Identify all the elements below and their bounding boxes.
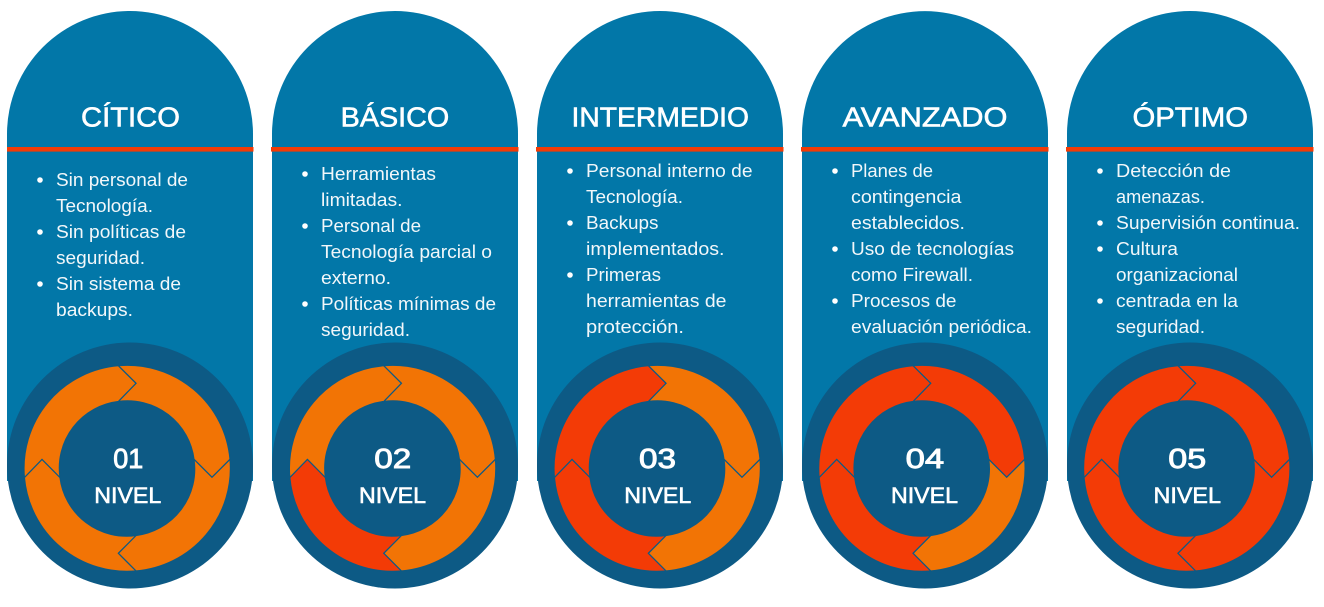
panel: nivel 05 óptimo	[1066, 11, 1314, 588]
panel background	[7, 11, 253, 481]
heading: INTERMEDIO	[572, 102, 749, 132]
panel background	[537, 11, 783, 481]
bullet list: Uso de tecnologías	[851, 239, 1014, 259]
panel: nivel 03 intermedio	[536, 11, 784, 588]
level badge	[537, 342, 783, 588]
bullet list: Personal de	[321, 216, 421, 236]
bullet list	[832, 161, 1032, 337]
bullet list: seguridad.	[1116, 317, 1205, 337]
level label: NIVEL	[1154, 483, 1221, 508]
level badge	[802, 342, 1048, 588]
bullet list: Personal interno de	[586, 161, 752, 181]
level number: 03	[639, 443, 676, 474]
panel: nivel 01 crítico	[7, 11, 254, 588]
bullet list: protección.	[586, 317, 684, 337]
red divider	[801, 147, 1048, 152]
panel: nivel 04 avanzado	[801, 11, 1048, 588]
red divider	[7, 147, 254, 152]
bullet list: Backups	[586, 213, 658, 233]
bullet list: como Firewall.	[851, 265, 973, 285]
bullet list: seguridad.	[321, 320, 410, 340]
panel background	[802, 11, 1048, 481]
level badge	[1067, 342, 1313, 588]
cycle ring	[1084, 365, 1290, 571]
bullet list: Primeras	[586, 265, 661, 285]
level number: 04	[906, 443, 944, 474]
heading: CÍTICO	[81, 102, 180, 132]
bullet list: backups.	[56, 300, 133, 320]
heading: AVANZADO	[842, 102, 1008, 132]
red divider	[536, 147, 784, 152]
bullet list: implementados.	[586, 239, 724, 259]
bullet list	[567, 161, 752, 337]
level label: NIVEL	[624, 483, 691, 508]
bullet list: Tecnología.	[586, 187, 683, 207]
bullet list: Sin personal de	[56, 170, 188, 190]
cycle ring	[554, 365, 760, 571]
bullet list: Políticas mínimas de	[321, 294, 496, 314]
red divider	[271, 147, 518, 152]
heading: BÁSICO	[341, 102, 449, 132]
bullet list	[1097, 161, 1300, 337]
bullet list: seguridad.	[56, 248, 145, 268]
bullet list: Tecnología.	[56, 196, 153, 216]
heading: ÓPTIMO	[1132, 102, 1248, 132]
level label: NIVEL	[359, 483, 426, 508]
bullet list: Tecnología parcial o	[321, 242, 492, 262]
bullet list: amenazas.	[1116, 187, 1205, 207]
bullet list: externo.	[321, 268, 391, 288]
cycle ring	[24, 365, 230, 571]
level badge	[7, 342, 253, 588]
bullet list: contingencia	[851, 187, 963, 207]
bullet list	[37, 170, 188, 320]
level label: NIVEL	[94, 483, 161, 508]
bullet list: Planes de	[851, 161, 933, 181]
cycle ring	[289, 365, 496, 571]
bullet list: establecidos.	[851, 213, 965, 233]
bullet list: evaluación periódica.	[851, 317, 1032, 337]
cycle ring	[819, 365, 1025, 571]
bullet list: centrada en la	[1116, 291, 1239, 311]
bullet list	[302, 164, 496, 340]
bullet list: herramientas de	[586, 291, 726, 311]
bullet list: Cultura	[1116, 239, 1179, 259]
panel background	[272, 11, 518, 481]
level number: 05	[1168, 443, 1206, 474]
bullet list: Sin sistema de	[56, 274, 181, 294]
bullet list: Procesos de	[851, 291, 956, 311]
bullet list: Supervisión continua.	[1116, 213, 1300, 233]
level number: 01	[113, 443, 143, 474]
panel: nivel 02 básico	[271, 11, 518, 588]
level badge	[272, 342, 518, 588]
bullet list: limitadas.	[321, 190, 402, 210]
bullet list: Detección de	[1116, 161, 1231, 181]
bullet list: organizacional	[1116, 265, 1238, 285]
level number: 02	[374, 443, 411, 474]
level label: NIVEL	[891, 483, 958, 508]
panel background	[1067, 11, 1313, 481]
bullet list: Sin políticas de	[56, 222, 186, 242]
bullet list: Herramientas	[321, 164, 436, 184]
red divider	[1066, 147, 1314, 152]
